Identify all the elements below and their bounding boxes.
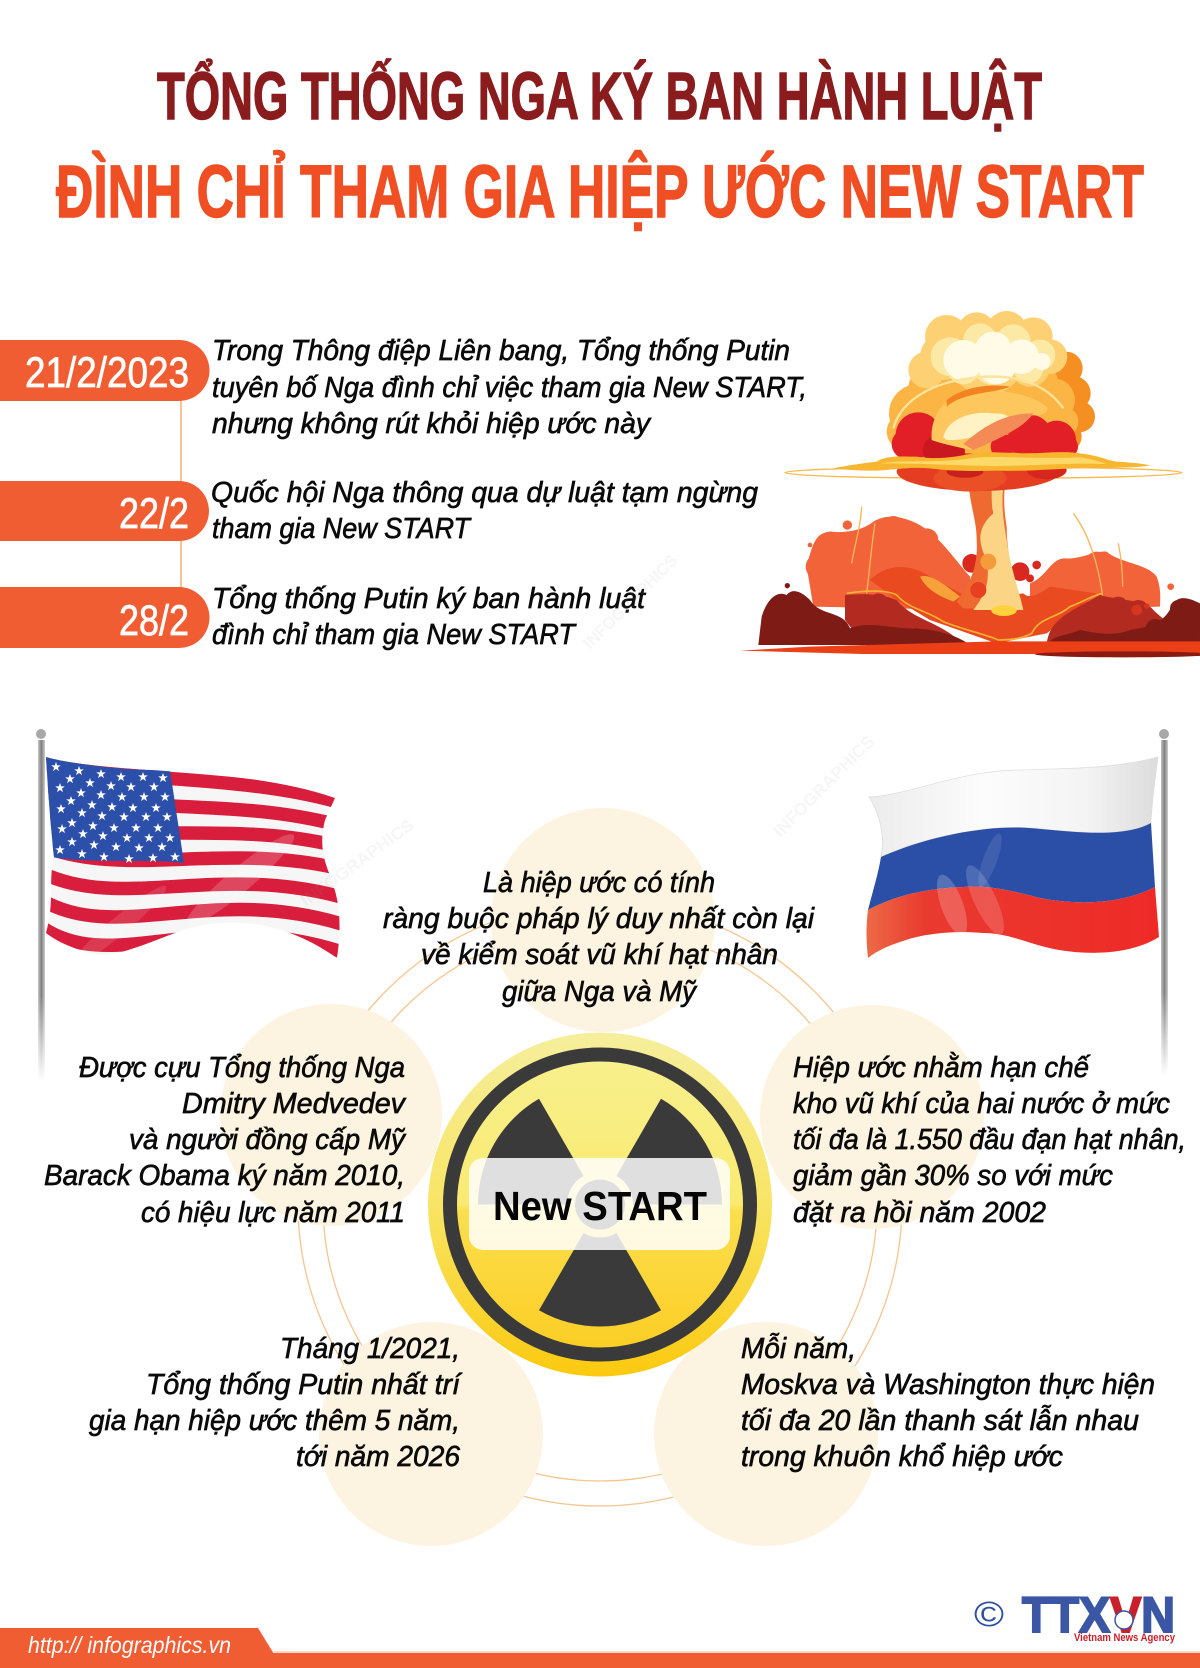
text block: top: Là hiệp ước có tính (483, 867, 715, 899)
text block: left (44, 1052, 407, 1229)
agency logo: TTXVN (1022, 1587, 1175, 1643)
timeline connector (180, 395, 182, 595)
text block: right: đặt ra hồi năm 2002 (793, 1197, 1046, 1229)
label: New START: New START (493, 1183, 707, 1229)
text block: top (383, 867, 815, 1008)
text block: left: và người đồng cấp Mỹ (129, 1124, 407, 1156)
copyright symbol: © (974, 1595, 1004, 1634)
text block: bottom left (89, 1333, 463, 1473)
label panel (469, 1158, 730, 1250)
event text 2 (211, 477, 758, 545)
flagpole left (36, 729, 46, 1081)
text block: left: Dmitry Medvedev (182, 1088, 407, 1120)
event text 3: Tổng thống Putin ký ban hành luật (212, 583, 646, 615)
text block: bottom right: Mỗi năm, (741, 1333, 856, 1365)
text block: bottom right: trong khuôn khổ hiệp ước (741, 1441, 1063, 1473)
text block: bottom left: Tháng 1/2021, (280, 1333, 460, 1365)
flagpole right (1159, 729, 1169, 1076)
disc (428, 1032, 772, 1376)
icon: radiation symbol (428, 1032, 772, 1376)
icon: Russia flag (866, 729, 1169, 1076)
trefoil (478, 1099, 722, 1327)
text block: right (793, 1052, 1186, 1229)
text block: bottom right: tối đa 20 lần thanh sát lẫn nhau (741, 1405, 1139, 1437)
event text 1: tuyên bố Nga đình chỉ việc tham gia New START, (212, 372, 807, 404)
footer tab (0, 1628, 274, 1654)
text block: left: Barack Obama ký năm 2010, (44, 1160, 405, 1192)
date pill 22/2 (0, 481, 209, 541)
website url: http:// infographics.vn (28, 1632, 231, 1658)
event text 2: Quốc hội Nga thông qua dự luật tạm ngừng (211, 477, 758, 509)
title (56, 58, 1144, 233)
date pill 22/2: 22/2 (119, 490, 189, 538)
watermarks: INFOGRAPHICS (769, 732, 878, 841)
event text 1: nhưng không rút khỏi hiệp ước này (212, 408, 652, 440)
text block: top: ràng buộc pháp lý duy nhất còn lại (383, 903, 815, 935)
agency logo: Vietnam News Agency (1074, 1632, 1176, 1644)
text block: top: giữa Nga và Mỹ (502, 976, 698, 1008)
watermarks: INFOGRAPHICS (579, 551, 681, 653)
event text 3 (212, 583, 646, 651)
event text 1: Trong Thông điệp Liên bang, Tổng thống Putin (212, 335, 790, 367)
text block: bottom left: tới năm 2026 (296, 1441, 460, 1473)
text block: bottom left: Tổng thống Putin nhất trí (146, 1369, 463, 1401)
text block: top: về kiểm soát vũ khí hạt nhân (421, 939, 778, 971)
text block: right: kho vũ khí của hai nước ở mức (793, 1088, 1170, 1120)
watermarks (297, 551, 878, 910)
text block: left: Được cựu Tổng thống Nga (79, 1052, 405, 1084)
text block: bottom right (741, 1333, 1155, 1473)
date pill 21/2/2023: 21/2/2023 (25, 349, 189, 397)
icon: USA flag (36, 729, 345, 1081)
panel: timeline (0, 335, 807, 651)
text block: bottom right: Moskva và Washington thực hiện (741, 1369, 1155, 1401)
panel: info bubbles (220, 808, 984, 1546)
event text 1 (212, 335, 807, 440)
watermarks: INFOGRAPHICS (297, 816, 418, 910)
illustration: mushroom cloud (740, 311, 1200, 657)
text block: bottom left: gia hạn hiệp ước thêm 5 năm, (89, 1405, 460, 1437)
decorative rings (298, 902, 902, 1506)
footer bar (0, 1653, 1200, 1668)
footer (0, 1587, 1200, 1668)
text block: right: tối đa là 1.550 đầu đạn hạt nhân, (793, 1124, 1186, 1156)
event text 2: tham gia New START (212, 513, 472, 545)
date pill 21/2/2023 (0, 340, 209, 401)
text block: right: Hiệp ước nhằm hạn chế (793, 1052, 1091, 1084)
event text 3: đình chỉ tham gia New START (212, 619, 577, 651)
date pill 28/2 (0, 587, 209, 648)
text block: right: giảm gần 30% so với mức (793, 1160, 1113, 1192)
date pill 28/2: 28/2 (119, 597, 189, 645)
text block: left: có hiệu lực năm 2011 (141, 1197, 405, 1229)
